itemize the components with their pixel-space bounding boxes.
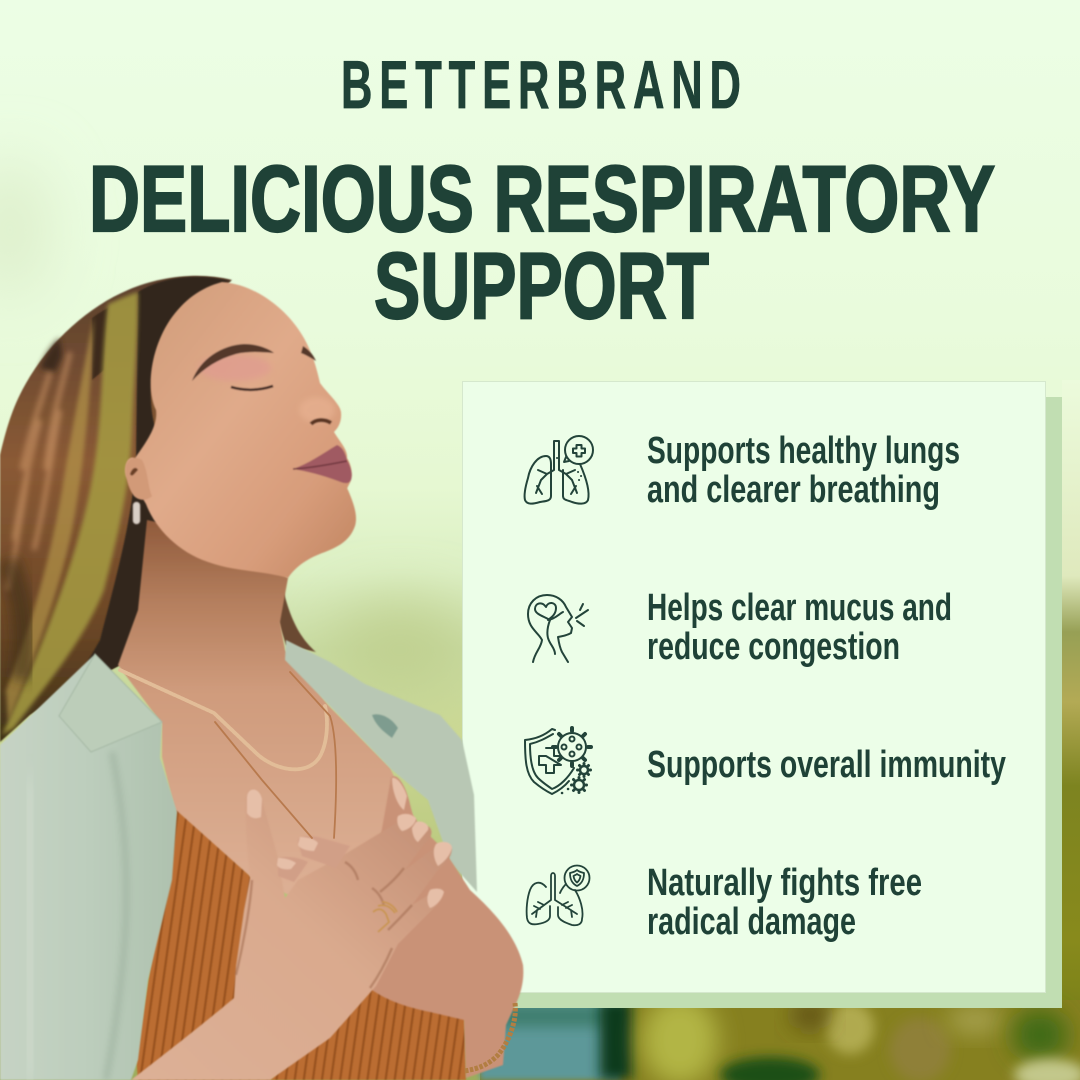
ring (373, 902, 397, 932)
panel: benefits (462, 382, 1046, 992)
top: orange ribbed (136, 810, 466, 1080)
back hand (340, 776, 523, 1078)
benefit 4: free radicals (527, 862, 922, 943)
icon: head with heart and breath (528, 595, 588, 662)
benefit 1: lungs (525, 430, 960, 511)
lips (293, 445, 352, 483)
icon: lungs with shield badge (527, 866, 590, 925)
nails (247, 778, 452, 908)
eyebrow (192, 344, 316, 381)
ear (126, 458, 152, 500)
nose highlight (299, 397, 335, 423)
benefit text (647, 587, 952, 668)
hidden fingers (278, 836, 350, 882)
photo: woman breathing with hands on chest (0, 276, 523, 1080)
brand logo: BETTERBRAND (341, 47, 741, 123)
benefit text: radical damage (647, 901, 856, 943)
bracelet (464, 1003, 515, 1071)
knuckle shading (236, 862, 412, 988)
icon: shield and virus (525, 728, 591, 794)
benefit text: Naturally fights free (647, 862, 922, 904)
face (125, 282, 356, 578)
hair behind neck right (278, 585, 316, 652)
sunlit glints (8, 352, 70, 590)
benefit text (647, 862, 922, 943)
front hand and forearm (131, 778, 452, 1080)
benefit text: Helps clear mucus and (647, 587, 952, 629)
benefit text: reduce congestion (647, 626, 900, 668)
panel shadow (478, 397, 1062, 1008)
left collar (59, 654, 162, 752)
left shirt panel (0, 654, 177, 1080)
benefit text (647, 430, 960, 511)
earring (133, 502, 140, 524)
closed eye (231, 386, 273, 390)
benefit text: and clearer breathing (647, 469, 940, 511)
headline (89, 146, 995, 338)
benefit 3: immunity (525, 728, 1006, 794)
shirt (0, 640, 477, 1080)
neck and chest (118, 520, 420, 900)
olive hair strand (2, 292, 138, 735)
eyelid blush (199, 355, 271, 381)
necklaces (120, 670, 336, 838)
benefit 2: mucus (528, 587, 952, 668)
right shirt panel (285, 640, 477, 892)
hair (0, 276, 316, 742)
nostril (311, 420, 331, 424)
benefit text: Supports healthy lungs (647, 430, 960, 472)
headline: SUPPORT (374, 233, 709, 338)
dark hair mass near face (70, 277, 230, 692)
icon: lungs with medical cross (525, 436, 593, 504)
